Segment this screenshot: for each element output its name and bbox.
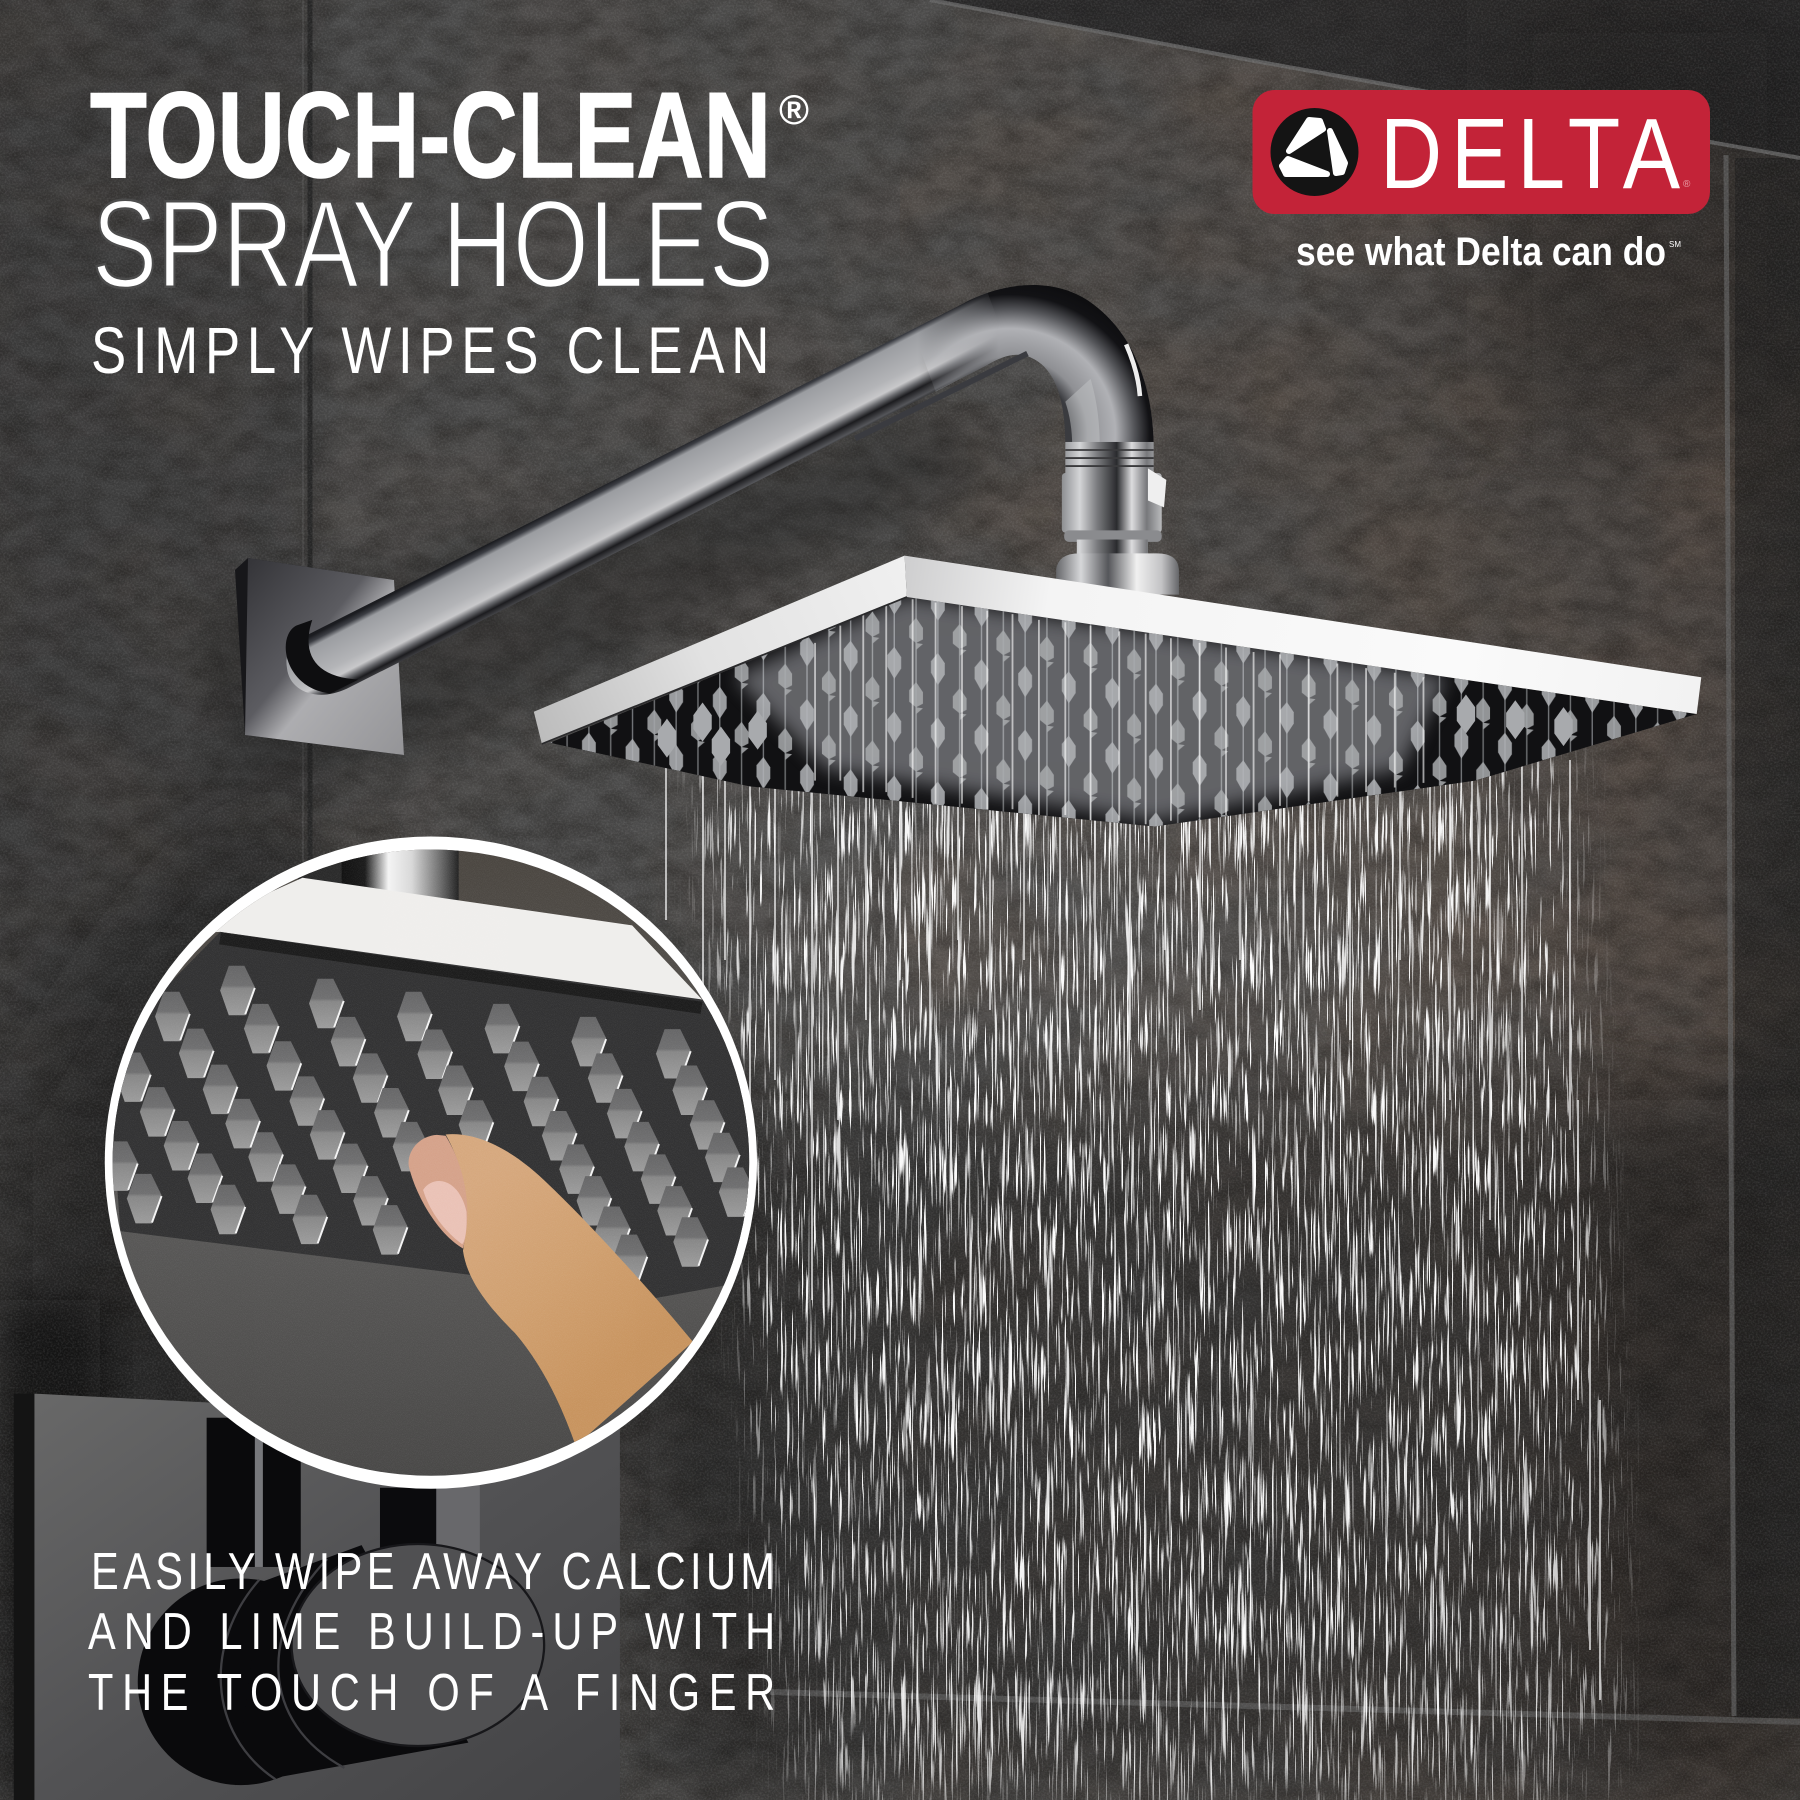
tagline: see what Delta can do	[1296, 230, 1666, 274]
title: Spray Holes: SPRAY HOLES	[92, 176, 774, 314]
service mark: SM	[1669, 240, 1681, 249]
water streams crossing the underside	[815, 599, 1423, 824]
valve knob	[138, 1544, 544, 1785]
water spray falling from the shower head	[640, 720, 1640, 1800]
shower neck seen in the inset	[342, 847, 459, 900]
Delta logo badge	[1252, 90, 1710, 214]
tile seams	[308, 0, 312, 1420]
chrome shower arm	[286, 285, 1154, 695]
small registered mark on badge: ®	[1683, 179, 1691, 190]
dark nozzle plate in the inset	[107, 932, 749, 1298]
hexagonal spray nozzles	[103, 966, 754, 1284]
shower arm wall plate	[235, 558, 404, 755]
caption text block: EASILY WIPE AWAY CALCIUM	[91, 1542, 775, 1600]
valve back plate	[14, 1394, 620, 1800]
white head rim in the inset	[177, 878, 706, 1003]
metal rim right face	[905, 556, 1701, 714]
magnified circular inset: finger wiping nozzles	[90, 830, 770, 1510]
caption text block: AND LIME BUILD-UP WITH	[88, 1602, 775, 1660]
shadow of shower arm on the wall	[200, 410, 1000, 780]
shower valve trim at lower left	[14, 1394, 620, 1800]
shower neck and connector	[1056, 442, 1179, 595]
metal rim left face	[534, 556, 907, 744]
caption text block: THE TOUCH OF A FINGER	[88, 1663, 775, 1721]
flange where the arm meets the plate	[286, 620, 358, 693]
rain shower head	[534, 556, 1701, 827]
registered mark: ®	[779, 86, 809, 133]
individual long water streams	[666, 760, 1600, 1700]
underside with spray nozzles	[550, 597, 1697, 827]
valve lever shadows	[207, 1418, 480, 1642]
finger	[409, 1134, 693, 1446]
caption text block	[88, 1542, 775, 1721]
title: Touch-Clean: TOUCH-CLEAN	[90, 67, 771, 203]
Delta wordmark: DELTA	[1380, 98, 1681, 209]
subtitle: Simply Wipes Clean: SIMPLY WIPES CLEAN	[91, 313, 769, 387]
icon: Delta triangle mark	[1270, 108, 1358, 196]
dark top right tile	[930, 0, 1800, 158]
